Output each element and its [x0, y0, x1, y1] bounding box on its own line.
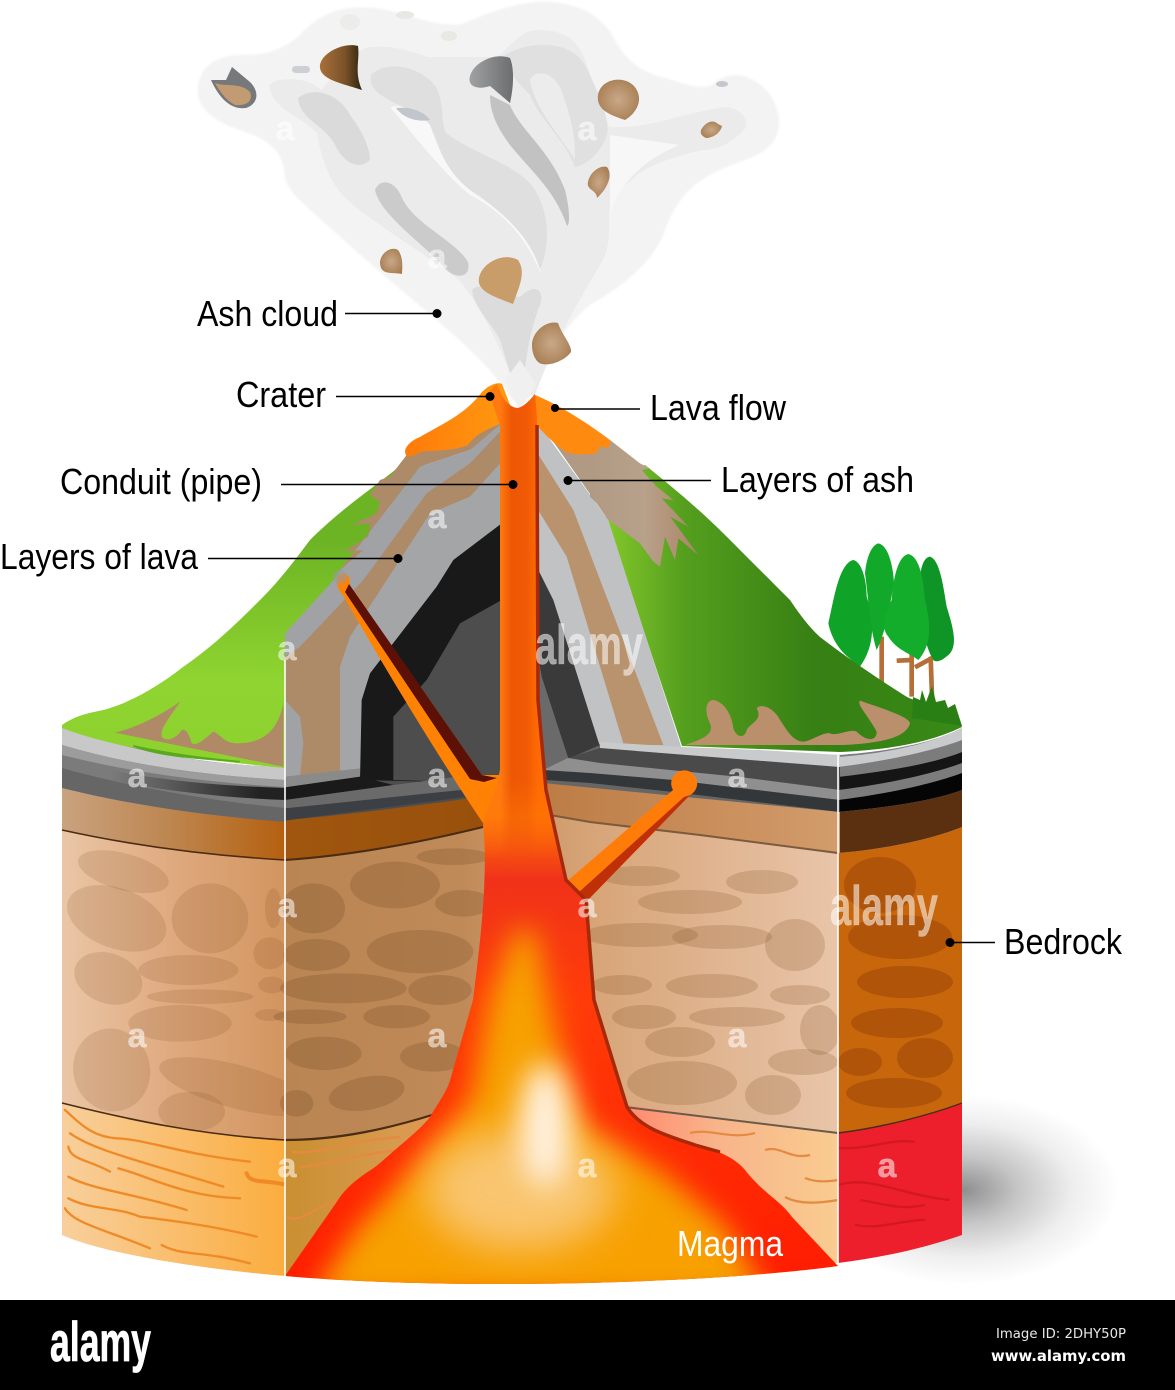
right tan: [533, 447, 663, 745]
watermarks: alamy: [830, 874, 938, 937]
rock: dark brown: [320, 45, 362, 90]
panel: central sand layer: [285, 1105, 838, 1276]
watermarks: a: [278, 887, 298, 925]
panel: band underlay left of conduit: [285, 740, 500, 830]
panel: central brown layer right: [543, 783, 840, 853]
right ash top: [533, 413, 617, 520]
left grey inner: [340, 462, 507, 773]
ground shadow: [809, 1095, 1119, 1285]
site url: www.alamy.com: [991, 1347, 1126, 1365]
panel: magma and conduit: [280, 360, 850, 1300]
conduit dark edge: [537, 425, 720, 1152]
stones left of conduit: [273, 848, 492, 1117]
panel: band strata right of conduit: [543, 742, 840, 812]
label: Conduit (pipe): Conduit (pipe): [60, 461, 262, 502]
watermarks: alamy: [535, 613, 643, 676]
ash patch lower left: [115, 702, 283, 767]
left tan layer: [285, 430, 507, 777]
rock: tan small: [701, 122, 722, 138]
lava flow left cap: [405, 383, 512, 456]
right outer grey: [533, 417, 682, 750]
panel: sand layer left: [62, 1103, 293, 1276]
label: Bedrock: [946, 921, 1123, 962]
trunks: [853, 637, 933, 707]
label: Crater: [236, 374, 494, 415]
panel: grey strata right: [838, 728, 962, 812]
lava flow right cap: [533, 395, 610, 454]
rock: silver: [470, 56, 513, 103]
magma body: [280, 380, 850, 1300]
side conduit right: [566, 770, 697, 902]
label: Ash cloud: Ash cloud: [197, 293, 338, 334]
watermarks: a: [578, 1147, 598, 1185]
panel: volcano section strata: [285, 413, 682, 821]
panel: bedrock right face: [838, 827, 962, 1133]
rock: tan bottom: [532, 323, 571, 364]
left black: [360, 523, 507, 783]
panel: bedrock left face: [58, 830, 320, 1140]
label: Ash cloud: [197, 293, 442, 334]
watermarks: a: [728, 1017, 748, 1055]
tree 3: [884, 554, 929, 660]
left dark grey: [393, 600, 507, 783]
label: Conduit (pipe): [60, 461, 518, 502]
left ash top: [340, 413, 502, 570]
left outer grey: [285, 420, 507, 780]
watermarks: a: [128, 757, 148, 795]
side conduit left: [333, 570, 505, 823]
watermarks: a: [578, 887, 598, 925]
label: Lava flow: Lava flow: [650, 387, 787, 428]
right grey inner: [533, 503, 623, 745]
band darkest left: [285, 788, 480, 821]
main conduit: [483, 384, 550, 852]
stones: [58, 842, 320, 1132]
rock: tan left: [380, 249, 402, 274]
panel: molten red layer right: [838, 1103, 962, 1263]
label: Crater: Crater: [236, 374, 326, 415]
label: Layers of ash: Layers of ash: [721, 459, 914, 500]
label: Layers of ash: [564, 459, 914, 500]
rock: tan core: [215, 83, 251, 105]
band grey top-left: [285, 768, 360, 787]
watermarks: a: [128, 1017, 148, 1055]
image id: Image ID: 2DHY50P: [996, 1327, 1126, 1342]
right dark grey: [537, 647, 613, 773]
ash finger patch right: [590, 440, 698, 567]
watermarks: a: [878, 1147, 898, 1185]
watermarks: a: [728, 757, 748, 795]
tree 1: [828, 560, 872, 667]
watermarks: a: [278, 630, 298, 668]
label: Lava flow: [551, 387, 787, 428]
watermarks: a: [278, 1147, 298, 1185]
band black left: [285, 777, 393, 800]
band dark grey left: [285, 775, 477, 808]
stones right of conduit: [582, 866, 840, 1115]
panel: ash cloud: [198, 2, 779, 400]
rock: tan peach: [479, 257, 522, 304]
panel: grey strata left: [62, 725, 285, 822]
right dark: [535, 563, 600, 760]
footer bar: [0, 1300, 1175, 1390]
ash patch lower right: [685, 700, 910, 745]
tree 2: [865, 543, 894, 650]
panel: brown layer left: [62, 788, 285, 1140]
section edge lines: [285, 660, 838, 1277]
watermarks: a: [428, 757, 448, 795]
watermarks: a: [428, 498, 448, 536]
rock: grey-tan: [211, 67, 256, 108]
panel: green slope left: [62, 455, 430, 768]
stones: [838, 857, 953, 1108]
watermarks: a: [578, 110, 598, 148]
label: Bedrock: Bedrock: [1004, 921, 1123, 962]
watermarks: a: [428, 238, 448, 276]
panel: green slope right: [607, 465, 962, 752]
panel: central brown layer left: [285, 797, 490, 860]
rocks in the ash cloud: [211, 45, 722, 364]
footer logo: alamy: [50, 1310, 151, 1373]
icon: trees: [828, 543, 954, 707]
watermarks: a: [428, 1017, 448, 1055]
tree 4: [920, 557, 954, 661]
watermarks: [128, 110, 938, 1185]
watermarks: a: [276, 110, 296, 148]
label: Layers of lava: Layers of lava: [0, 536, 199, 577]
panel: dark soil right: [838, 790, 962, 853]
rock: tan large: [598, 80, 639, 120]
crater notch: [505, 360, 536, 408]
panel: central section (bedrock): [273, 815, 840, 1140]
rock: tan mid: [588, 167, 610, 198]
icon: grass: [912, 686, 962, 726]
label: Magma: Magma: [677, 1223, 784, 1264]
label: Layers of lava: [0, 536, 402, 577]
